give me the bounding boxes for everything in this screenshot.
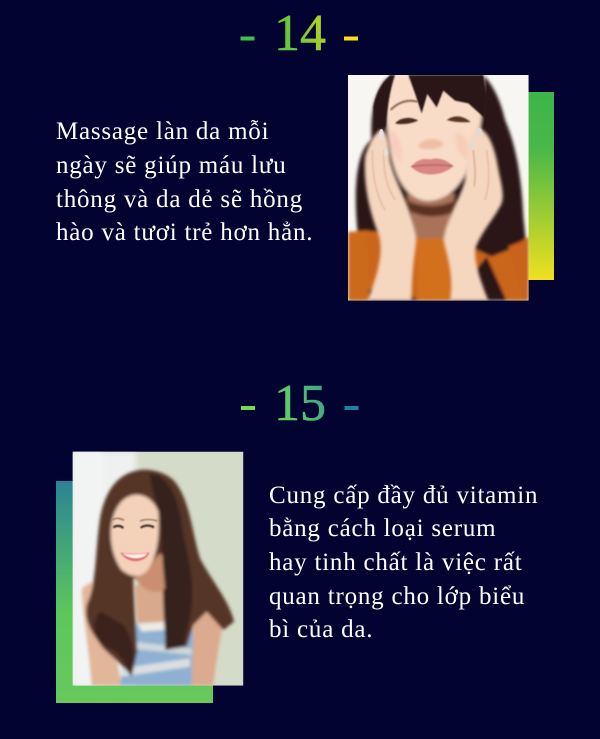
text block: vitamin tip: bằng cách loại serum [269, 515, 496, 542]
face [111, 495, 159, 576]
text block: massage tip: hào và tươi trẻ hơn hẳn. [56, 219, 313, 246]
hair back [348, 75, 529, 301]
heading: number 15: 15 [274, 375, 326, 432]
text block: massage tip: thông và da dẻ sẽ hồng [56, 186, 303, 213]
eyes [113, 526, 123, 528]
chest [135, 585, 167, 623]
left hand and arm [365, 130, 416, 301]
accent bar: teal to green gradient [56, 481, 213, 703]
right hand and arm [443, 128, 503, 301]
text block: vitamin tip [269, 482, 538, 643]
hair fringe [408, 75, 487, 118]
top [120, 622, 193, 686]
text block: vitamin tip: bì của da. [269, 616, 373, 643]
text block: vitamin tip: Cung cấp đầy đủ vitamin [269, 482, 538, 509]
heading: number 14: 14 [274, 5, 326, 62]
text block: vitamin tip: quan trọng cho lớp biểu [269, 583, 525, 610]
finger creases [372, 150, 489, 210]
text block: massage tip: ngày sẽ giúp máu lưu [56, 152, 287, 179]
face [386, 75, 483, 201]
photo: smiling woman with long hair [73, 452, 243, 686]
nose [418, 139, 444, 149]
eyebrows and eyes [391, 101, 417, 110]
heading: number 14 [240, 5, 358, 62]
sweater [348, 231, 529, 301]
accent bar: green to yellow gradient [528, 92, 554, 280]
text block: vitamin tip: hay tinh chất là việc rất [269, 549, 522, 576]
neck [407, 193, 455, 238]
nails [379, 129, 384, 140]
text block: massage tip: Massage làn da mỗi [56, 118, 269, 145]
photo: woman massaging her face [348, 75, 529, 301]
hair [86, 470, 234, 677]
heading: number 15 [241, 375, 358, 432]
shoulders and arms [82, 582, 122, 686]
text block: massage tip [56, 118, 313, 246]
lips [411, 158, 453, 174]
smile [120, 552, 149, 561]
